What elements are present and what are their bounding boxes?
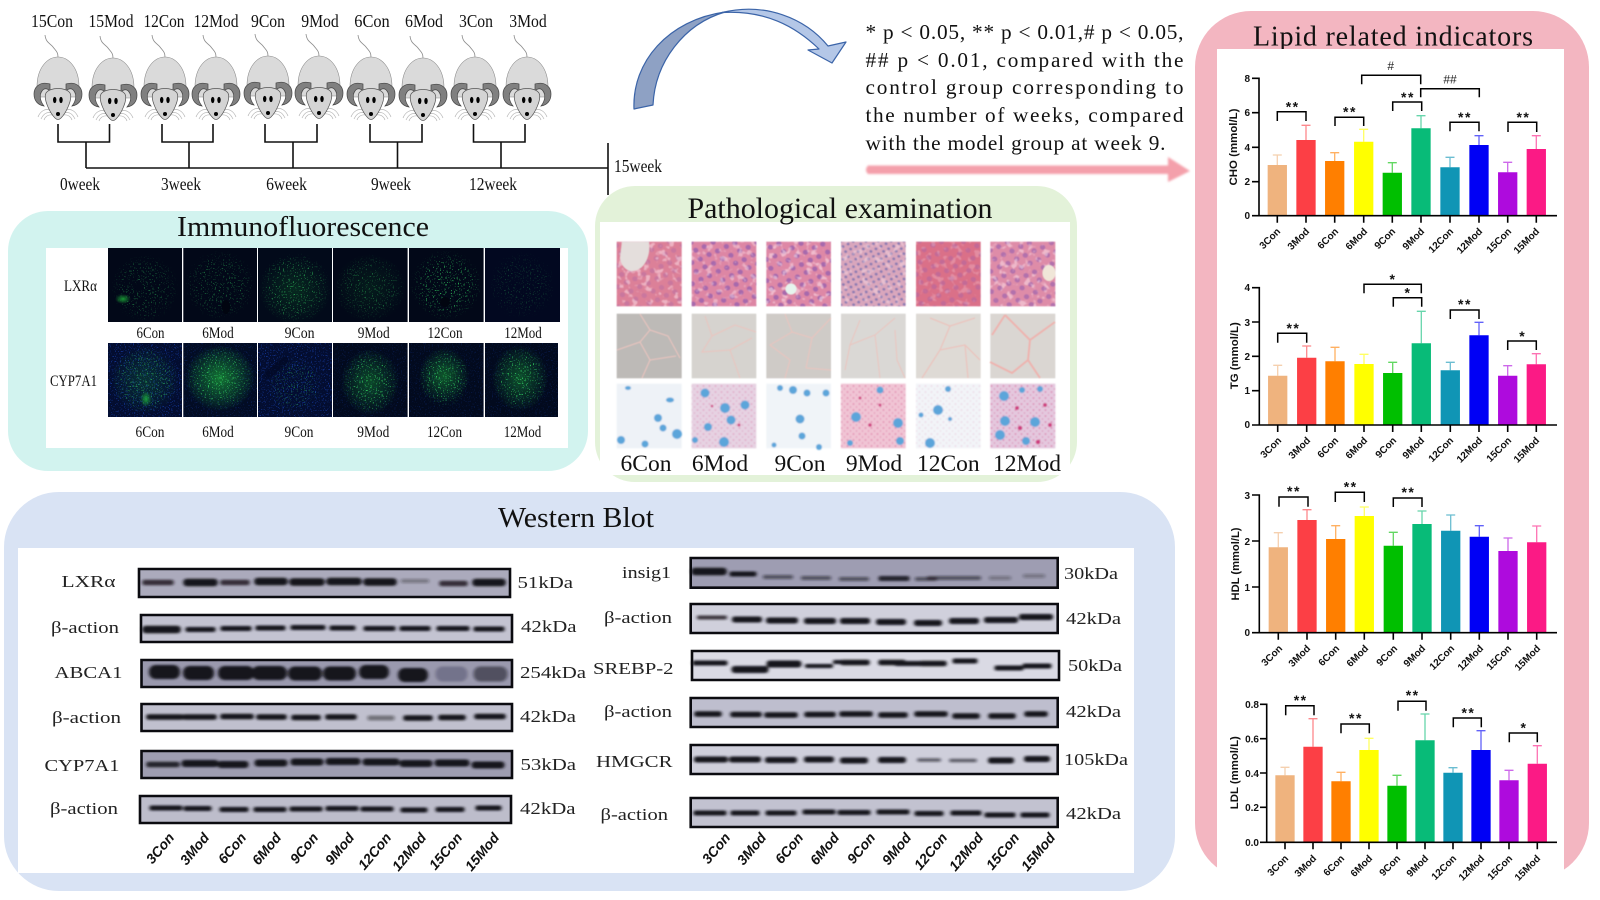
blot labels: right column: 42kDa xyxy=(1066,702,1122,721)
blot labels: left column: 42kDa xyxy=(521,617,577,636)
lane labels: right column: 12Mod xyxy=(946,829,987,874)
week labels: 3week xyxy=(161,174,201,194)
chart: TG: 4 xyxy=(1244,283,1250,294)
chart: LDL: 9Con xyxy=(1378,853,1403,879)
chart: CHO: 2 xyxy=(1244,177,1250,188)
captions and row labels: CYP7A1 xyxy=(50,373,97,390)
chart: LDL: 0.4 xyxy=(1245,769,1259,780)
captions and row labels: 9Mod xyxy=(357,424,389,441)
text block: significance note: ## p < 0.01, compared with the xyxy=(866,48,1184,72)
chart: CHO: 15Con xyxy=(1485,226,1514,256)
chart: TG: TG (mmol/L) xyxy=(1229,322,1241,389)
blot labels: left column: 42kDa xyxy=(520,707,577,726)
chart: TG: * xyxy=(1405,284,1411,300)
chart: CHO: ## xyxy=(1443,72,1457,86)
chart: LDL: 12Con xyxy=(1430,853,1459,883)
blot labels: left column: β-action xyxy=(52,708,122,727)
captions and row labels: 12Con xyxy=(428,325,462,342)
lane labels: left column: 3Mod xyxy=(177,829,213,868)
chart: CHO: 12Con xyxy=(1427,226,1456,256)
chart: TG: * xyxy=(1390,271,1396,287)
tiles: H&E staining row xyxy=(617,242,1056,306)
chart: TG: ** xyxy=(1286,320,1300,336)
chart: HDL: 12Mod xyxy=(1456,643,1486,674)
captions and row labels: 6Con xyxy=(136,424,164,441)
chart: LDL: * xyxy=(1521,720,1527,736)
heading: western blot: Western Blot xyxy=(498,502,654,534)
blot labels: right column: HMGCR xyxy=(596,752,673,771)
chart: HDL: HDL (mmol/L) xyxy=(1230,527,1242,600)
blot labels: left column: 51kDa xyxy=(518,573,574,592)
chart: CHO xyxy=(1228,59,1557,257)
chart: CHO: 9Mod xyxy=(1401,226,1427,253)
group labels: 3Con xyxy=(459,11,493,31)
heading: lipid: Lipid related indicators xyxy=(1253,22,1533,52)
chart: LDL: LDL (mmol/L) xyxy=(1229,736,1241,809)
week labels: 12week xyxy=(469,174,517,194)
chart: LDL: 0.0 xyxy=(1245,838,1259,849)
chart: CHO: 12Mod xyxy=(1455,226,1485,257)
text block: significance note: control group corresponding to xyxy=(866,75,1184,99)
chart: CHO: 3Con xyxy=(1258,226,1283,252)
icon: mice row xyxy=(34,34,551,121)
lane labels: right column: 12Con xyxy=(911,830,950,873)
blot labels: right column: 42kDa xyxy=(1066,609,1122,628)
panel: immunofluorescence xyxy=(8,211,588,471)
chart: CHO: CHO (mmol/L) xyxy=(1228,108,1240,186)
chart: LDL: 6Mod xyxy=(1349,853,1375,880)
text block: significance note: * p < 0.05, ** p < 0.01,# p < 0.05, xyxy=(866,20,1184,44)
lane labels: left column: 3Con xyxy=(143,830,177,867)
chart: HDL: 6Mod xyxy=(1345,643,1371,670)
blot labels: left column: β-action xyxy=(50,799,119,818)
week labels: 0week xyxy=(60,174,100,194)
chart: CHO: ** xyxy=(1343,104,1357,120)
chart: LDL: 12Mod xyxy=(1457,853,1487,884)
group labels: 12Con xyxy=(144,11,184,31)
lane labels: left column: 9Con xyxy=(287,830,321,867)
captions: 12Con xyxy=(917,451,980,477)
chart: HDL: 15Con xyxy=(1485,643,1514,673)
week labels: 15week xyxy=(614,156,662,176)
chart: CHO: 4 xyxy=(1244,143,1250,154)
captions and row labels: 6Mod xyxy=(202,325,234,342)
lane labels: right column: 9Mod xyxy=(879,829,915,868)
chart: TG: 15Mod xyxy=(1512,435,1542,466)
chart: TG: 3Mod xyxy=(1287,435,1313,462)
captions and row labels: 6Mod xyxy=(202,424,234,441)
panel: pathological examination xyxy=(595,186,1077,482)
heading: pathological: Pathological examination xyxy=(688,192,992,225)
group labels: 15Mod xyxy=(88,11,134,31)
lane labels: left column: 15Con xyxy=(426,830,465,873)
captions and row labels: 9Mod xyxy=(358,325,390,342)
text block: significance note xyxy=(866,20,1184,155)
chart: HDL: ** xyxy=(1344,478,1358,494)
chart: TG: 9Mod xyxy=(1401,435,1427,462)
chart: LDL xyxy=(1229,687,1557,884)
heading: immunofluorescence: Immunofluorescence xyxy=(177,211,429,243)
lane labels: right column: 6Mod xyxy=(807,829,843,868)
chart: TG: 0 xyxy=(1244,420,1250,431)
lane labels: right column: 15Con xyxy=(983,830,1022,873)
micrographs: LXR alpha row xyxy=(108,248,560,324)
blot labels: right column: SREBP-2 xyxy=(593,659,674,678)
blot labels: left column: ABCA1 xyxy=(54,663,122,682)
captions: 9Mod xyxy=(846,451,902,477)
panel: western blot xyxy=(4,492,1175,891)
panel: lipid related indicators xyxy=(1195,11,1589,900)
week labels: 9week xyxy=(371,174,411,194)
chart: HDL: 3 xyxy=(1244,491,1250,502)
lane labels: left column: 12Con xyxy=(355,830,394,873)
captions and row labels: 9Con xyxy=(284,424,314,441)
chart: HDL: 9Con xyxy=(1375,643,1400,669)
chart: TG: 6Mod xyxy=(1344,435,1370,462)
text block: significance note: with the model group at week 9. xyxy=(866,131,1166,155)
chart: HDL: 3Con xyxy=(1260,643,1285,669)
group labels: 9Con xyxy=(251,11,285,31)
chart: LDL: 0.6 xyxy=(1245,734,1259,746)
blot labels: right column: 42kDa xyxy=(1066,804,1122,823)
chart: CHO: ** xyxy=(1458,109,1472,125)
chart: HDL: 1 xyxy=(1244,583,1250,594)
chart: HDL: 9Mod xyxy=(1402,643,1428,670)
micrographs: CYP7A1 row xyxy=(108,343,558,417)
chart: HDL: 12Con xyxy=(1428,643,1457,673)
blot labels: right column: β-action xyxy=(600,805,669,824)
chart: HDL: 0 xyxy=(1244,628,1250,639)
group labels: 9Mod xyxy=(301,11,339,31)
week labels: 6week xyxy=(266,174,307,194)
chart: CHO: # xyxy=(1387,59,1394,73)
lane labels: right column: 6Con xyxy=(772,830,806,867)
chart: CHO: 9Con xyxy=(1373,226,1398,252)
chart: TG: 1 xyxy=(1244,386,1250,397)
chart: LDL: 15Con xyxy=(1486,853,1515,883)
lane labels: left column xyxy=(143,829,503,874)
tiles: PAS staining row xyxy=(617,384,1055,450)
blot labels: left column: CYP7A1 xyxy=(44,756,120,775)
timeline brackets and axis xyxy=(58,124,608,195)
chart: LDL: 0.2 xyxy=(1245,803,1259,814)
chart: TG: ** xyxy=(1458,296,1472,312)
arrow: pink to lipid panel xyxy=(866,157,1190,182)
chart: TG xyxy=(1229,271,1557,466)
chart: LDL: ** xyxy=(1294,692,1308,708)
chart: LDL: 9Mod xyxy=(1405,853,1431,880)
chart: LDL: 3Con xyxy=(1266,853,1291,879)
chart: HDL: 15Mod xyxy=(1513,643,1543,674)
blot labels: right column: β-action xyxy=(604,702,673,721)
chart: LDL: 6Con xyxy=(1322,853,1347,879)
chart: TG: 12Mod xyxy=(1455,435,1485,466)
captions and row labels: 9Con xyxy=(285,325,315,342)
blot labels: left column xyxy=(44,572,587,818)
captions: 12Mod xyxy=(993,451,1061,477)
group labels: 6Con xyxy=(354,11,390,31)
captions and row labels: LXRα xyxy=(64,278,97,295)
captions and row labels: 12Mod xyxy=(504,325,542,342)
chart: TG: 3 xyxy=(1244,318,1250,329)
chart: LDL: 0.8 xyxy=(1245,700,1259,711)
blot labels: left column: β-action xyxy=(51,618,120,637)
captions xyxy=(621,451,1061,477)
lane labels: left column: 6Con xyxy=(215,830,249,867)
chart: HDL: 2 xyxy=(1244,537,1250,548)
chart: CHO: 6Con xyxy=(1316,226,1341,252)
group labels: 15Con xyxy=(31,11,73,31)
chart: LDL: ** xyxy=(1349,710,1363,726)
lane labels: right column: 3Mod xyxy=(734,829,770,868)
chart: TG: 15Con xyxy=(1485,435,1514,465)
chart: CHO: ** xyxy=(1286,98,1300,114)
chart: LDL: 15Mod xyxy=(1513,853,1543,884)
captions and row labels: 6Con xyxy=(136,325,164,342)
chart: TG: 2 xyxy=(1244,352,1250,363)
chart: CHO: 6Mod xyxy=(1344,226,1370,253)
chart: CHO: 6 xyxy=(1244,108,1250,119)
chart: TG: 12Con xyxy=(1427,435,1456,465)
chart: HDL: 6Con xyxy=(1317,643,1342,669)
group labels: 3Mod xyxy=(509,11,547,31)
lane labels: right column: 9Con xyxy=(844,830,878,867)
blot labels: right column xyxy=(593,563,1129,824)
captions: 9Con xyxy=(775,451,826,477)
chart: LDL: 3Mod xyxy=(1293,853,1319,880)
chart: HDL: 3Mod xyxy=(1287,643,1313,670)
lane labels: left column: 15Mod xyxy=(462,829,503,874)
captions and row labels: 12Mod xyxy=(504,424,541,441)
lane labels: left column: 9Mod xyxy=(322,829,358,868)
blot labels: left column: 42kDa xyxy=(520,799,576,818)
chart: CHO: 0 xyxy=(1244,211,1250,222)
blot labels: right column: 50kDa xyxy=(1068,656,1123,675)
captions and row labels: 12Con xyxy=(427,424,462,441)
chart: CHO: ** xyxy=(1516,109,1530,125)
text block: significance note: the number of weeks, compared xyxy=(866,103,1184,127)
blot labels: left column: 53kDa xyxy=(520,755,577,774)
chart: TG: 3Con xyxy=(1259,435,1284,461)
blot labels: right column: β-action xyxy=(604,608,673,627)
chart: CHO: 15Mod xyxy=(1512,226,1542,257)
blot labels: right column: 30kDa xyxy=(1064,564,1119,583)
captions: 6Con xyxy=(621,451,672,477)
chart: HDL: ** xyxy=(1287,483,1301,499)
panel: mouse experiment timeline xyxy=(31,11,662,195)
week labels xyxy=(60,156,662,194)
chart: LDL: ** xyxy=(1406,687,1420,703)
chart: CHO: ** xyxy=(1401,89,1415,105)
group labels: 12Mod xyxy=(194,11,238,31)
tiles: oil red staining row xyxy=(617,314,1055,378)
blot labels: left column: LXRα xyxy=(62,572,116,591)
blot labels: right column: 105kDa xyxy=(1064,750,1129,769)
chart: TG: 6Con xyxy=(1316,435,1341,461)
chart: CHO: 8 xyxy=(1244,74,1250,85)
chart: HDL: ** xyxy=(1401,484,1415,500)
captions: 6Mod xyxy=(692,451,748,477)
group labels: 6Mod xyxy=(405,11,443,31)
blot labels: left column: 254kDa xyxy=(520,663,587,682)
lane labels: left column: 6Mod xyxy=(249,829,285,868)
captions and row labels xyxy=(50,278,542,441)
chart: LDL: ** xyxy=(1461,704,1475,720)
lane labels: right column: 3Con xyxy=(699,830,733,867)
group labels xyxy=(31,11,547,31)
chart: TG: 9Con xyxy=(1374,435,1399,461)
lane labels: right column xyxy=(699,829,1059,874)
lane labels: left column: 12Mod xyxy=(389,829,430,874)
chart: TG: * xyxy=(1519,328,1526,344)
arrow: curved blue xyxy=(634,9,846,109)
blot labels: right column: insig1 xyxy=(622,563,671,582)
blot set: right column xyxy=(691,558,1059,827)
blot set: left column xyxy=(139,569,512,823)
lane labels: right column: 15Mod xyxy=(1018,829,1059,874)
chart: HDL xyxy=(1230,478,1557,674)
chart: CHO: 3Mod xyxy=(1286,226,1312,253)
